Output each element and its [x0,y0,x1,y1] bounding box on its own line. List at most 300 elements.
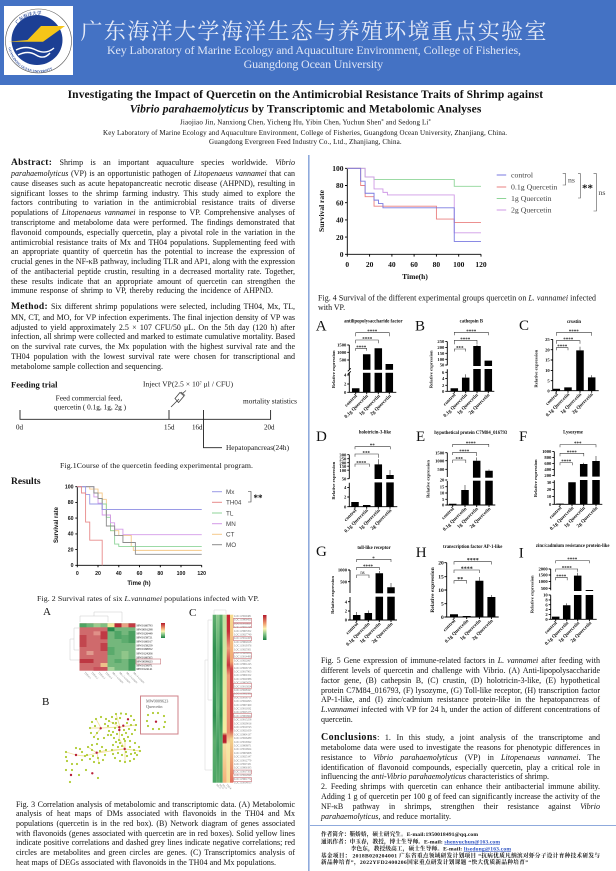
figure 3 panel A: metabolite heat map: Mx-1-sample [111,672,125,685]
legend: populations [212,489,263,549]
footer: authors and funding: 通讯作者：申玉春，教授，博士生导师。E-mail: shenyuchun@163.com [321,837,500,846]
logo: Guangdong Ocean University: GUANGDONG OCEAN UNIVERSITY [8,48,52,72]
text block: method: on the survival rate curves, the Mx population with the highest survival rate and the [11,342,295,351]
bar chart D: holotricin-3-like: 250 [339,456,347,461]
line chart: figure 4 quercetin survival: 0 [340,250,344,259]
column divider [308,155,310,871]
bar chart F: lysozyme: 2g Quercetin [576,506,599,529]
bar chart H: transcription factor AP-1-like: H [416,545,427,561]
figure 3 panel C: gene heat map: LOC113808834 [234,652,252,655]
bar chart H: transcription factor AP-1-like: 1g Quercetin [460,619,483,642]
figure 3 panel C: gene heat map: LOC113827740 [234,634,252,636]
line chart: survival of six populations: 120 [197,571,206,577]
bar chart F: lysozyme: 400 [544,467,552,472]
authors and affiliations [103,118,507,146]
figure 3 panel A: metabolite heat map: MW0168052 [136,647,153,651]
caption: figure 5: quercetin. [321,715,353,724]
bar chart B: cathepsin B: 4 [442,376,445,381]
legend: quercetin groups: 0.1g Quercetin [511,182,557,192]
line chart: survival of six populations: Time (h) [127,581,151,587]
bar chart B: cathepsin B: 0 [442,389,445,394]
bar chart B: cathepsin B: 1g Quercetin [457,393,480,416]
figure 3 panel A: metabolite heat map: MW0126449 [136,632,153,636]
bar chart H: transcription factor AP-1-like: 0 [441,615,444,621]
text block: abstract: crucial genes in the NF-κB pathway, including TLR and AP1, along with the expression [11,257,295,266]
text block: conclusions: Adding 1 g of quercetin per 100 g of feed can significantly increase the activity of the [321,792,600,801]
bar chart A: anti-lipopolysaccharide factor: 4 [344,373,347,378]
inset: quercetin subnetwork [140,696,178,734]
bar chart D: holotricin-3-like: 0 [344,504,347,509]
bar chart F: lysozyme: *** [574,442,582,447]
line chart: survival of six populations: 40 [116,571,122,577]
figure 3 panel C: gene heat map: LOC113825147 [234,756,252,759]
text block: conclusions: NF-κB pathway in shrimps, strengthen their resistance against Vibrio [321,802,600,811]
figure 3 panel C: gene heat map: LOC113811832 [234,708,252,710]
bar chart D: holotricin-3-like: 50 [342,476,347,481]
text block: method: Method: Six different shrimp populations were selected, including TH04, Mx, TL, [11,302,295,312]
figure 3 panel C: gene heat map: LOC113829481 [234,615,252,618]
line chart: survival of six populations: Survival rate [54,506,60,543]
authors and affiliations: Jiaojiao Jin, Nanxiong Chen, Yicheng Hu, Yibin Chen, Yuchun Shen [180,118,381,126]
bar chart E: hypothetical protein: Relative expression [425,460,430,498]
bar chart B: cathepsin B: 6 [442,370,445,375]
footer: authors and funding: 新品种培育”，2022YFD2400206国家重点研发计划课题 “快大优质新品种培育” [321,858,528,867]
figure 3 panel A: metabolite heat map: MW0160017 [136,639,153,643]
figure 3 panel C: gene heat map: Mx-3 [221,784,228,790]
legend: populations: MN [226,521,236,528]
bar chart G: toll-like receptor: **** [363,565,374,570]
bar chart F: lysozyme: 1g Quercetin [564,506,587,529]
bar chart D: holotricin-3-like: 2g Quercetin [370,508,393,532]
text block: conclusions: metabolome data were used to investigate the reasons for phenotypic differences in [321,743,600,752]
figure 3 panel A: metabolite heat map: MW0124141 [136,667,153,671]
timeline: feeding trial schedule: μl / CFU) [202,380,234,388]
bar chart C: crustin: 15 [545,358,550,363]
bar chart G: toll-like receptor: 0.1g Quercetin [346,622,372,648]
bar chart C: crustin: 0.1g Quercetin [545,392,571,418]
bar chart E: hypothetical protein: 500 [437,467,445,472]
text block: conclusions: influencing the anti-Vibrio parahaemolyticus characteristics of shrimp. [321,772,549,781]
text block: abstract: an appropriate quantity of quercetin has the potential to increase the expression of [11,247,295,256]
bar chart A: anti-lipopolysaccharide factor: 2g Quercetin [370,394,393,417]
bar chart I: zinc/cadmium resistance protein-like: **** [567,558,578,563]
bar chart D: holotricin-3-like: 100 [339,468,347,473]
figure 3 panel A: metabolite heat map: MW0160793 [136,624,153,628]
figure 3 panel C: gene heat map: LOC113819376 [234,645,252,648]
caption: figure 2: Fig. 2 Survival rates of six L.vannamei populations infected with VP. [37,594,259,603]
bar chart D: holotricin-3-like [316,429,397,534]
line chart: figure 4 quercetin survival: 100 [332,164,344,173]
bar chart G: toll-like receptor: ns [360,571,365,576]
line chart: figure 4 quercetin survival: 80 [433,260,440,269]
figure 3 panel C: gene heat map: LOC113821193 [234,626,252,629]
bar chart F: lysozyme [519,429,602,532]
figure 3 panel C: gene heat map: LOC113812265 [234,637,252,640]
bar chart I: zinc/cadmium resistance protein-like: 1g Quercetin [558,621,581,644]
figure 3 panel C: gene heat map: LOC113818711 [234,696,252,699]
heading: results: Results [11,477,41,487]
figure 3 panel C: gene heat map: LOC113812779 [234,759,252,762]
bar chart B: cathepsin B: 2g Quercetin [468,393,491,416]
line chart: survival of six populations [54,484,263,587]
figure 3 panel A: metabolite heat map: MW0009623 [136,660,153,664]
bar chart C: crustin: 1g Quercetin [560,392,583,416]
bar chart B: cathepsin B: control [443,393,458,407]
caption: figure 3: heat maps of DEGs associated with flavonoids in the TH04 and Mx populations. [16,858,276,867]
figure 3 panel C: gene heat map: LOC113822846 [234,774,252,777]
bar chart H: transcription factor AP-1-like: 15 [438,574,444,580]
bar chart I: zinc/cadmium resistance protein-like: 4 [545,607,548,612]
bar chart I: zinc/cadmium resistance protein-like: Relative expression [530,575,535,613]
bar chart H: transcription factor AP-1-like: control [443,618,458,633]
bar chart D: holotricin-3-like: holotricin-3-like [359,431,391,436]
legend: quercetin groups: ** [582,182,594,194]
bar chart D: holotricin-3-like: *** [363,452,371,457]
bar chart F: lysozyme: control [549,506,564,520]
figure 3 panel A: metabolite heat map: MW0091298 [136,627,153,631]
timeline: feeding trial schedule: Hepatopancreas(24h) [226,443,290,452]
bar chart A: anti-lipopolysaccharide factor: **** [362,337,373,342]
bar chart B: cathepsin B: cathepsin B [460,319,483,324]
figure 3 panel A: metabolite heat map: MW0158259 [136,643,153,647]
figure 3 panel C: gene heat map: LOC113824093 [234,700,252,703]
bar chart G: toll-like receptor: 2g Quercetin [371,622,395,645]
bar chart A: anti-lipopolysaccharide factor: Relative expression [331,350,336,388]
bar chart E: hypothetical protein: hypothetical protein C7M84_016793 [434,431,508,436]
figure 3 panel C: gene heat map: LOC113804918 [234,641,252,644]
text block: conclusions: parahaemolyticus, and reduce mortality. [321,812,451,821]
bar chart B: cathepsin B: Relative expression [428,350,433,388]
figure 3 panel C: gene heat map: LOC113809152 [234,674,252,677]
lab name in English: Guangdong Ocean University [244,57,383,71]
bar chart I: zinc/cadmium resistance protein-like: 6 [545,602,548,607]
caption: figure 3 [16,800,296,867]
bar chart E: hypothetical protein [416,429,508,533]
line chart: figure 4 quercetin survival: 60 [336,198,344,207]
caption: figure 5: Fig. 5 Gene expression of immune-related factors in L. vannamei after feeding with [321,656,600,665]
logo: Guangdong Ocean University [4,6,73,75]
caption: figure 5: L.vannamei infected with VP for 24 h, under the action of different concentrations of [321,705,600,714]
footer: authors and funding: 李色东，教授级高工，硕士生导师。E-mail: lisedong@163.com [351,844,511,853]
caption: figure 1: Fig.1Course of the quercetin feeding experimental program. [60,461,253,470]
poster title: Vibrio parahaemolyticus by Transcriptomic and Metabolomic Analyses [130,103,482,115]
bar chart C: crustin: crustin [567,320,581,325]
text block: abstract: immune response of shrimp to VP, thereby reducing the incidence of AHPND. [11,286,273,295]
bar chart D: holotricin-3-like: 150 [339,464,347,469]
line chart: survival of six populations: 20 [68,547,74,553]
figure 3 panel C: gene heat map: LOC113816592 [234,741,252,744]
figure 3 panel C: gene heat map: LOC113801772 [234,778,252,781]
line chart: figure 4 quercetin survival: 20 [336,233,344,242]
bar chart G: toll-like receptor: control [346,621,360,636]
footer: authors and funding: 基金项目： 2018B020204001 广东省重点领域研发计划项目 “抗病优质凡纳滨对虾分子设计育种技术研发与 [321,851,600,859]
bar chart F: lysozyme: 600 [544,461,552,466]
timeline: feeding trial schedule: 15d [164,424,175,432]
bar chart F: lysozyme: 1000 [542,449,552,454]
bar chart G: toll-like receptor: 0 [345,618,348,623]
bar chart F: lysozyme: Lysozyme [563,430,583,435]
caption: figure 5 [320,656,600,724]
figure 3 panel C: gene heat map: LOC113826280 [234,737,252,740]
bar chart D: holotricin-3-like: 0.1g Quercetin [344,508,370,534]
figure 3 panel C: gene heat map: LOC113828347 [234,689,252,692]
caption: figure 3: analysis of heat maps of DMs associated with flavonoids in the TH04 and Mx [16,809,295,818]
text block: abstract: parahaemolyticus (VP) is an opportunistic pathogen of Litopenaeus vannamei that can [11,169,295,178]
text block: conclusions: Conclusions: 1. In this study, a joint analysis of the transcriptome and [321,732,600,743]
timeline: feeding trial schedule: Feed commercial feed, [56,394,122,402]
line chart: figure 4 quercetin survival: 100 [453,260,465,269]
bar chart A: anti-lipopolysaccharide factor: **** [367,330,378,335]
bar chart E: hypothetical protein: control [441,506,456,521]
figure 3 panel A: metabolite heat map: TH04-3 [97,672,106,680]
figure 3 panel C: gene heat map [189,607,266,791]
line chart: survival of six populations: 20 [95,571,101,577]
bar chart B: cathepsin B: 250 [437,339,445,344]
timeline: feeding trial schedule: mortality statistics [243,396,297,406]
caption: figure 5: different levels of quercetin and challenge with Vibrio. (A) Anti-lipopolysaccharide [321,666,600,675]
text block: abstract: of the antibacterial peptide crustin, resulting in a decreased mortality rate. Together, [11,267,295,276]
figure 3 panel C: gene heat map: LOC113803352 [234,630,252,633]
bar chart G: toll-like receptor: 1000 [338,568,348,573]
figure 3 panel C: gene heat map: LOC113802586 [234,693,252,696]
figure 3 panel C: gene heat map: LOC113801245 [234,663,252,666]
bar chart C: crustin: 10 [545,368,550,373]
bar chart D: holotricin-3-like: 4 [344,485,347,490]
line chart: survival of six populations: 0 [76,571,79,577]
caption: figure 4: Fig. 4 Survival of the different experimental groups quercetin on L. vannamei infected [318,294,596,302]
figure 3 panel C: gene heat map: LOC113821659 [234,730,252,733]
bar chart B: cathepsin B: 200 [437,345,445,350]
figure 3 panel C: gene heat map: LOC113823175 [234,711,252,714]
line chart: figure 4 quercetin survival: 120 [475,260,487,269]
bar chart E: hypothetical protein: 1000 [435,458,445,463]
legend: quercetin groups: ns [568,176,575,184]
bar chart I: zinc/cadmium resistance protein-like: **** [562,566,572,571]
poster title [68,89,543,115]
bar chart C: crustin: 0 [547,388,550,393]
bar chart H: transcription factor AP-1-like: transcription factor AP-1-like [443,545,502,550]
bar chart H: transcription factor AP-1-like: ** [457,577,463,583]
text block: abstract [10,158,296,295]
timeline: feeding trial schedule: 20d [264,424,275,432]
bar chart B: cathepsin B: 100 [437,357,445,362]
bar chart A: anti-lipopolysaccharide factor: control [344,394,359,408]
figure 3 panel C: gene heat map: LOC113827431 [234,763,252,766]
caption: figure 3: populations (quercetin is in the red box). (B) Network diagram of genes associated [16,819,295,828]
legend: quercetin groups [497,170,605,214]
figure 3 panel B: gene network: B [42,696,49,708]
line chart: figure 4 quercetin survival: Time(h) [402,272,428,281]
bar chart E: hypothetical protein: 2g Quercetin [469,507,492,530]
bar chart F: lysozyme: **** [567,451,577,456]
bar chart H: transcription factor AP-1-like: Relative expression [430,567,436,613]
lab name in Chinese: 广东海洋大学海洋生态与养殖环境重点实验室 [80,19,546,44]
line chart: figure 4 quercetin survival: Survival rate [317,189,326,232]
bar chart H: transcription factor AP-1-like: **** [461,566,473,572]
figure 3 panel C: gene heat map: C [189,607,196,619]
inset: quercetin subnetwork: MW0009623 [146,698,168,704]
text block: abstract: antimicrobial resistance traits of Mx and TH04 populations. Supplementing feed with [11,238,295,247]
bar chart I: zinc/cadmium resistance protein-like: 8 [545,597,548,602]
authors and affiliations: * [428,120,432,124]
bar chart H: transcription factor AP-1-like: 2g Quercetin [472,619,495,642]
bar chart B: cathepsin B: 50 [440,363,445,368]
bar chart C: crustin: Relative expression [534,349,539,388]
figure 3 panel A: metabolite heat map: TH04-4 [104,672,113,680]
bar chart C: crustin: **** [557,345,568,350]
logo: Guangdong Ocean University: 广东海洋大学 [15,10,42,24]
text block: conclusions [320,732,600,821]
line chart: survival of six populations: 80 [157,571,163,577]
bar chart B: cathepsin B: 150 [437,351,445,356]
text block: abstract: populations of Litopenaeus vannamei in response to VP. Comprehensive analyses of [11,208,295,217]
bar chart D: holotricin-3-like: control [344,508,359,523]
footer: authors and funding [321,830,600,867]
figure 3 panel A: metabolite heat map: MW0159071 [136,664,153,668]
legend: quercetin groups: 1g Quercetin [511,194,552,203]
figure 3 panel C: gene heat map: LOC113810743 [234,726,252,729]
bar chart F: lysozyme: 800 [544,455,552,460]
bar chart F: lysozyme: 30 [547,480,552,485]
bar chart I: zinc/cadmium resistance protein-like: 0.1g Quercetin [544,621,570,647]
bar chart C: crustin: C [519,318,529,334]
bar chart I: zinc/cadmium resistance protein-like: 1000 [539,579,548,584]
bar chart B: cathepsin B: **** [466,330,477,335]
figure 3 panel A: metabolite heat map: Mx-3-sample [125,672,139,685]
bar chart I: zinc/cadmium resistance protein-like: 500 [541,586,548,591]
bar chart D: holotricin-3-like: 200 [339,460,347,465]
timeline: feeding trial schedule [16,380,297,452]
figure 3 panel A: metabolite heat map: MW0124206 [136,652,153,656]
legend: quercetin groups: control [511,170,534,180]
bar chart H: transcription factor AP-1-like [416,545,502,645]
text block: method: adjusted to yield approximately 2.5 × 107 CFU/50 μL. On the 5th day (120 h) after [11,323,295,332]
caption: figure 3: indicate positive correlations and dashed grey lines indicate negative correlations; red [16,838,295,847]
caption: figure 5: factor gene, (B) cathepsin B, (C) crustin, (D) holotricin-3-like, (E) hypothetical [321,676,600,685]
bar chart A: anti-lipopolysaccharide factor [316,318,403,420]
text block: abstract: transcriptome and metabolome data were performed. The findings demonstrated that [11,218,295,227]
bar chart I: zinc/cadmium resistance protein-like: I [519,545,524,561]
figure 3 panel A: metabolite heat map: TH04-1 [83,672,92,680]
bar chart F: lysozyme: F [519,429,527,445]
text block: abstract: significant losses to the shrimp farming industry. This study aimed to explore the [11,189,295,198]
bar chart F: lysozyme: Relative expression [533,459,538,497]
caption: figure 4: with VP. [318,303,345,312]
bar chart E: hypothetical protein: 0 [442,503,445,508]
figure 3 panel C: gene heat map: LOC113820386 [234,678,252,681]
figure 3 panel A: metabolite heat map: Mx-2-sample [118,672,132,685]
bar chart E: hypothetical protein: 20 [440,478,445,483]
authors and affiliations: Guangdong Evergreen Feed Industry Co., Ltd., Zhanjiang, China. [209,138,402,146]
bar chart F: lysozyme: **** [561,460,572,465]
bar chart D: holotricin-3-like: 300 [339,452,347,457]
timeline: feeding trial schedule: Inject VP(2.5 × 10 [143,380,200,388]
bar chart H: transcription factor AP-1-like: 20 [438,560,444,566]
bar chart E: hypothetical protein: 5 [442,497,445,502]
bar chart D: holotricin-3-like: 2 [344,495,347,500]
legend: populations: MO [226,542,236,549]
figure 3 panel C: gene heat map: LOC113808071 [234,744,252,747]
legend: quercetin groups: 2g Quercetin [511,206,552,214]
figure 3 panel A: metabolite heat map: MW0160505 [136,655,153,659]
line chart: survival of six populations: 100 [65,484,74,490]
bar chart C: crustin [519,318,599,418]
line chart: figure 4 quercetin survival: 40 [388,260,396,269]
bar chart G: toll-like receptor: toll-like receptor [357,546,391,551]
lab name in English: Key Laboratory of Marine Ecology and Aquaculture Environment, College of Fisheries, [107,43,521,57]
bar chart C: crustin: control [545,392,560,407]
bar chart B: cathepsin B: B [415,318,425,334]
bar chart D: holotricin-3-like: ** [370,444,375,449]
bar chart A: anti-lipopolysaccharide factor: 1000 [337,350,347,355]
bar chart I: zinc/cadmium resistance protein-like: 2 [545,612,548,617]
heading: feeding trial: Feeding trial [11,380,58,390]
bar chart A: anti-lipopolysaccharide factor: 500 [339,358,347,363]
poster title: Investigating the Impact of Quercetin on the Antimicrobial Resistance Traits of Shrimp against [68,89,543,101]
line chart: figure 4 quercetin survival: 0 [345,260,349,269]
caption: figure 4 [318,294,596,312]
figure 3 panel C: gene heat map: LOC113807460 [234,704,252,707]
bar chart G: toll-like receptor: 2 [345,609,348,614]
bar chart I: zinc/cadmium resistance protein-like: 1500 [539,573,548,578]
bar chart H: transcription factor AP-1-like: 10 [438,588,444,594]
authors and affiliations: and Sedong Li [384,118,428,126]
figure 3 panel C: gene heat map: LOC113800964 [234,715,252,718]
bar chart E: hypothetical protein: **** [466,442,476,447]
figure 3 panel C: gene heat map: Mx-2 [218,784,225,790]
bar chart A: anti-lipopolysaccharide factor: **** [356,346,367,351]
legend: populations: ** [254,493,263,503]
text block: abstract: flavonoid compounds, especially quercetin, play a pivotal role in the variation in the [11,228,295,237]
bar chart A: anti-lipopolysaccharide factor: 1g Quercetin [359,394,382,417]
line chart: figure 4 quercetin survival: 40 [336,216,344,225]
text block: abstract: cause diseases such as acute hepatopancreatic necrotic disease (AHPND), resulting in [11,179,295,188]
figure 3 panel C: gene heat map: LOC113815258 [234,719,252,722]
legend: quercetin groups: ns [598,188,605,197]
figure 3 panel C: gene heat map: LOC113805679 [234,682,252,685]
text block: abstract: factors contributing to variation in the antimicrobial resistance traits of diverse [11,198,295,207]
bar chart E: hypothetical protein: 15 [440,484,445,489]
bar chart E: hypothetical protein: 1500 [435,450,445,455]
text block: abstract: Abstract: Shrimp is an important aquaculture species worldwide. Vibrio [11,158,295,168]
bar chart A: anti-lipopolysaccharide factor: antilipopolysaccharide factor [344,319,403,324]
bar chart D: holotricin-3-like: 1g Quercetin [359,508,382,532]
line chart: survival of six populations: 80 [68,500,74,506]
text block: abstract: these results indicate that an appropriate amount of quercetin can strengthen the [11,277,295,286]
figure 3 panel C: gene heat map: LOC113817903 [234,670,252,674]
header banner [0,0,616,85]
line chart: figure 4 quercetin survival: 20 [366,260,374,269]
text block: method: infection, all shrimp were collected and marked to estimate cumulative mortality. Based [11,332,295,341]
bar chart F: lysozyme: 10 [547,494,552,499]
bar chart B: cathepsin B: 0.1g Quercetin [443,393,469,419]
figure 3 panel C: gene heat map: LOC113803608 [234,752,252,755]
figure 3 panel C: gene heat map: LOC113814490 [234,656,252,659]
icon: syringe [171,390,186,407]
bar chart A: anti-lipopolysaccharide factor: 0.1g Quercetin [344,394,370,420]
figure 3 panel A: metabolite heat map: TH04-2 [90,672,99,680]
figure 3 panel C: gene heat map: LOC113814013 [234,781,252,784]
bar chart C: crustin: 5 [547,378,550,383]
timeline: feeding trial schedule: 7 [200,380,202,386]
legend: populations: CT [226,532,235,539]
text block: method: TH04 population with the lowest survival rate were chosen for transcriptional and [11,352,295,361]
figure 3 panel C: gene heat map: Mx-1 [215,784,222,790]
bar chart G: toll-like receptor: G [316,544,327,560]
bar chart B: cathepsin B: 2 [442,383,445,388]
line chart: survival of six populations: 60 [68,516,74,522]
legend: populations: TH04 [226,500,242,507]
